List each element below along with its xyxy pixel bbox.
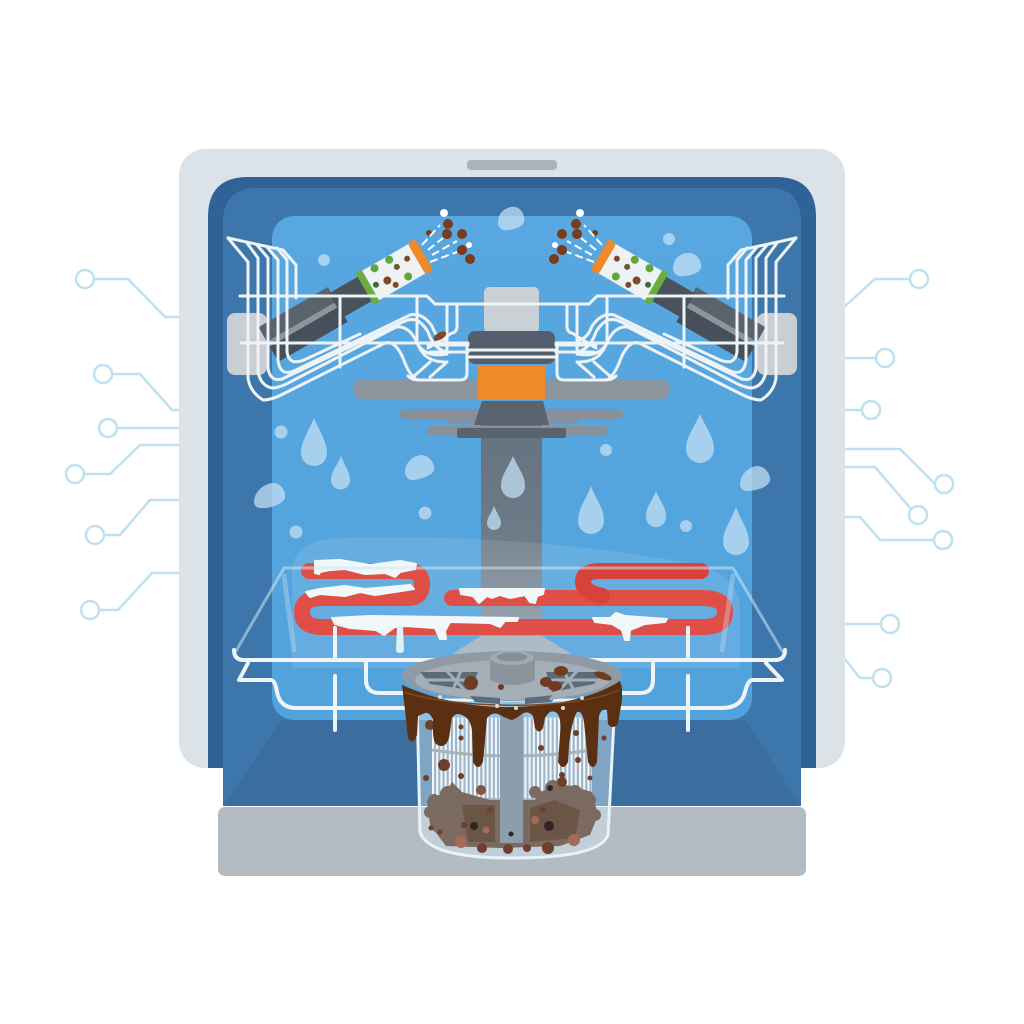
hub dark collar	[468, 331, 555, 364]
meltwater drip	[396, 627, 404, 653]
filter mesh	[432, 718, 592, 802]
circuit lines: left	[66, 270, 180, 619]
sludge rim highlight	[404, 690, 620, 705]
debris pile	[424, 780, 601, 848]
tub outer wall	[208, 177, 816, 768]
tub floor	[223, 720, 801, 806]
debris on rack	[432, 329, 448, 343]
tub inner wall	[223, 188, 801, 806]
filter stem	[500, 715, 523, 843]
door handle	[467, 160, 557, 170]
lid grate	[415, 660, 609, 700]
right spray tube	[549, 209, 797, 375]
lid hub	[490, 658, 535, 685]
heating element	[302, 571, 725, 627]
lower collar	[457, 428, 566, 438]
door frame	[179, 149, 845, 768]
circuit lines: right	[844, 270, 953, 687]
hub top cap	[484, 287, 539, 333]
upper rack: right half	[512, 238, 796, 400]
debris pile dark core	[462, 800, 580, 842]
upper spray arm	[353, 379, 670, 399]
heating element upper loop	[583, 571, 701, 596]
lower rack	[234, 568, 785, 730]
back panel	[272, 216, 752, 720]
upper rack: left half	[228, 238, 512, 400]
hub lower neck	[474, 401, 549, 425]
central wash column	[481, 425, 542, 655]
scale deposits	[306, 560, 667, 640]
filter backing	[432, 717, 592, 802]
rack cross rails	[468, 350, 556, 357]
glass sheen	[292, 537, 740, 668]
left spray tube	[227, 209, 475, 375]
filter rings	[432, 750, 592, 800]
plinth	[218, 807, 806, 876]
strainer cup	[417, 700, 615, 858]
sludge highlights	[438, 695, 584, 710]
hub orange band	[478, 365, 545, 400]
debris pieces	[423, 720, 606, 854]
lower spray arm	[427, 426, 608, 435]
strainer lid	[402, 651, 622, 704]
debris on lid	[464, 666, 613, 691]
middle spray arm	[400, 409, 623, 424]
column base flare	[452, 636, 572, 654]
water droplets	[254, 207, 770, 555]
food sludge overflow	[402, 681, 622, 767]
